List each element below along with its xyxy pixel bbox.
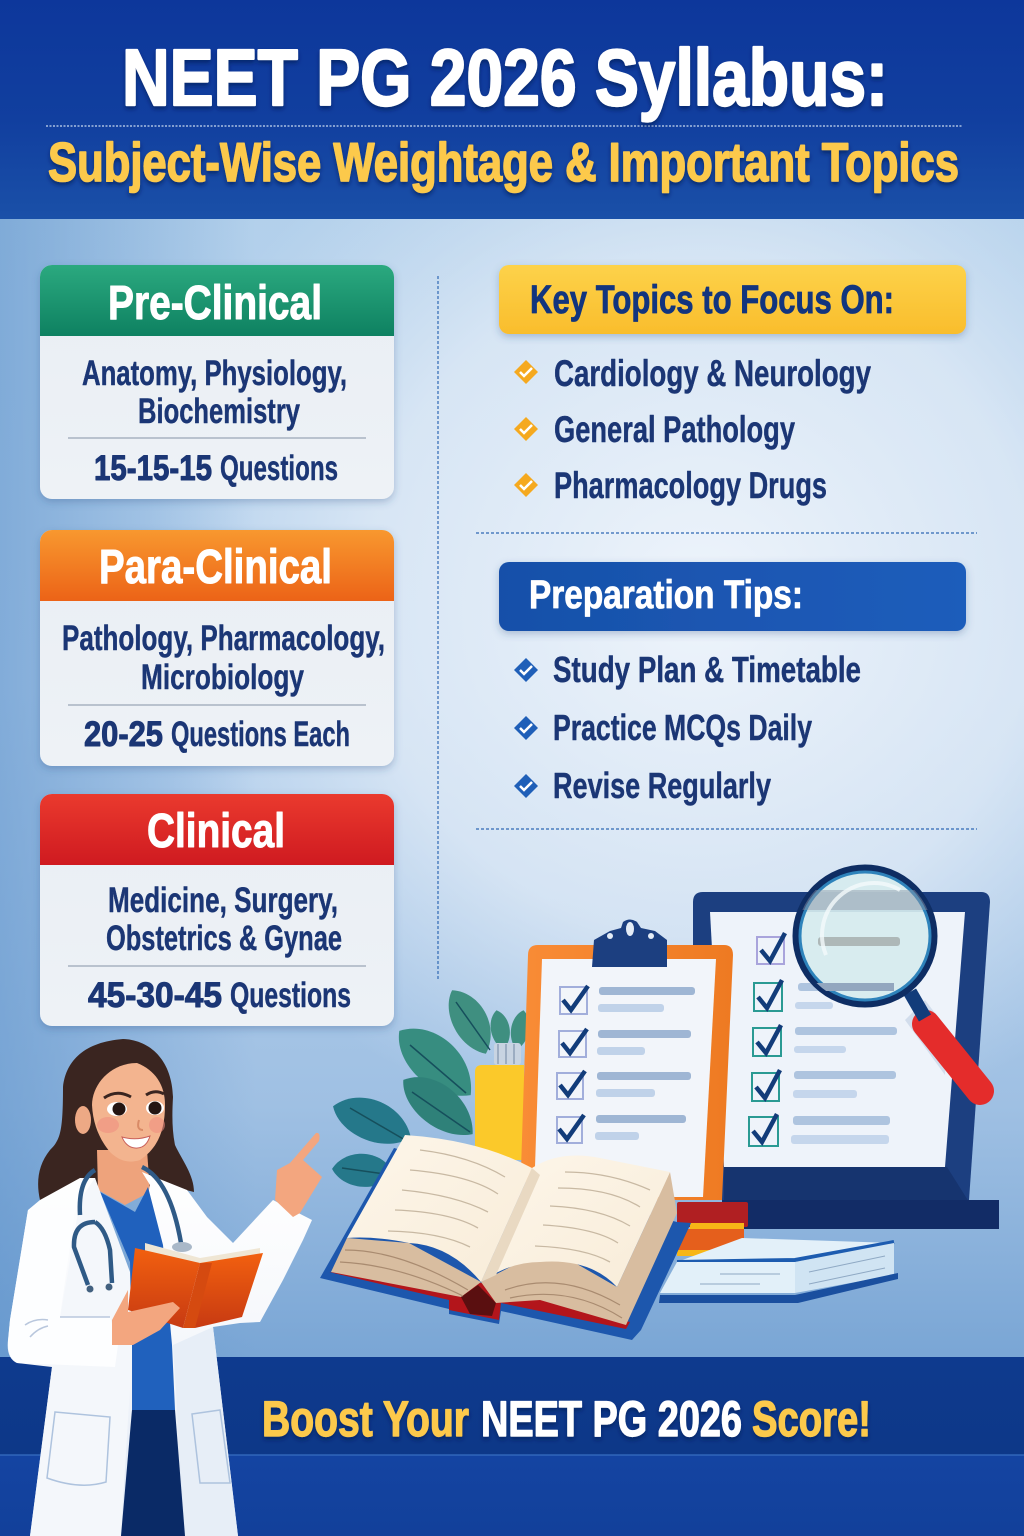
coat front panels xyxy=(30,1178,132,1536)
heading pill: preparation tips: Preparation Tips: xyxy=(529,573,803,617)
illustration: study desk xyxy=(320,868,999,1340)
heading pill: key topics: Key Topics to Focus On: xyxy=(530,278,894,322)
footer call to action xyxy=(262,1391,871,1447)
topic: Pharmacology Drugs xyxy=(514,465,827,506)
question count: Questions xyxy=(230,976,351,1015)
coat sleeve xyxy=(8,1210,118,1367)
subjects: Anatomy, Physiology, xyxy=(82,354,347,393)
pockets xyxy=(47,1410,230,1485)
tip: Revise Regularly xyxy=(514,765,771,806)
hair xyxy=(38,1039,194,1200)
panel: key topics xyxy=(499,265,966,506)
icon: yellow bottle xyxy=(475,1043,524,1160)
subjects xyxy=(62,619,385,697)
trousers xyxy=(121,1410,185,1536)
heading pill: preparation tips xyxy=(499,562,966,631)
topic: Cardiology & Neurology: Cardiology & Neurology xyxy=(554,353,871,394)
title: NEET PG 2026 Syllabus: xyxy=(122,33,888,122)
question count xyxy=(88,976,351,1015)
ear xyxy=(75,1106,91,1134)
stethoscope xyxy=(74,1167,192,1292)
vertical divider xyxy=(437,276,439,980)
topic: Pharmacology Drugs: Pharmacology Drugs xyxy=(554,465,827,506)
topic: General Pathology xyxy=(514,409,795,450)
footer call to action: NEET PG 2026 xyxy=(481,1391,742,1447)
footer call to action: Score! xyxy=(752,1391,871,1447)
heading: Para-Clinical: Para-Clinical xyxy=(99,541,332,594)
panel: Para-Clinical xyxy=(40,530,394,766)
question count: 20-25 xyxy=(84,715,163,754)
topic: General Pathology: General Pathology xyxy=(554,409,795,450)
footer call to action: Boost Your xyxy=(262,1391,469,1447)
icon: plant leaves xyxy=(326,981,532,1189)
tip: Study Plan & Timetable: Study Plan & Timetable xyxy=(553,649,861,690)
subjects: Pathology, Pharmacology, xyxy=(62,619,385,658)
subjects: Obstetrics & Gynae xyxy=(106,919,342,958)
coat xyxy=(8,1172,312,1536)
hand holding book xyxy=(112,1290,180,1345)
tip: Practice MCQs Daily xyxy=(514,707,812,748)
panel: Pre-Clinical xyxy=(40,265,394,499)
icon: monitor with checklist xyxy=(693,892,999,1229)
panel: Clinical xyxy=(40,794,394,1026)
icon: open book xyxy=(320,1135,691,1340)
open orange book xyxy=(128,1243,263,1328)
topic: Cardiology & Neurology xyxy=(514,353,871,394)
tip: Revise Regularly: Revise Regularly xyxy=(553,765,771,806)
question count: 45-30-45 xyxy=(88,976,222,1015)
question count: 15-15-15 xyxy=(94,449,212,488)
footer band xyxy=(0,1357,1024,1536)
panel: preparation tips xyxy=(499,562,966,806)
icon: clipboard xyxy=(520,920,733,1200)
facial features xyxy=(97,1092,165,1148)
heading: Pre-Clinical: Pre-Clinical xyxy=(108,277,322,330)
subjects xyxy=(106,881,342,958)
subjects: Biochemistry xyxy=(138,392,300,431)
subjects: Microbiology xyxy=(141,658,304,697)
pointing hand xyxy=(275,1133,322,1217)
coat right panel xyxy=(173,1327,238,1536)
header band xyxy=(0,0,1024,219)
heading: Clinical: Clinical xyxy=(147,805,285,858)
clipboard checklist xyxy=(557,986,695,1143)
scrub top xyxy=(100,1187,175,1410)
question count: Questions xyxy=(220,449,338,488)
question count: Questions Each xyxy=(171,715,350,754)
neck xyxy=(97,1150,150,1205)
face xyxy=(92,1063,165,1162)
heading pill: key topics xyxy=(499,265,966,334)
icon: stacked books xyxy=(659,1202,898,1303)
coat shadow lines xyxy=(25,1317,110,1337)
icon: magnifying glass xyxy=(790,868,980,1091)
illustration: doctor xyxy=(8,1039,322,1536)
question count xyxy=(84,715,350,754)
tip: Practice MCQs Daily: Practice MCQs Daily xyxy=(553,707,812,748)
subjects: Medicine, Surgery, xyxy=(108,881,338,920)
question count xyxy=(94,449,338,488)
subjects xyxy=(82,354,347,431)
screen checklist xyxy=(749,933,900,1146)
